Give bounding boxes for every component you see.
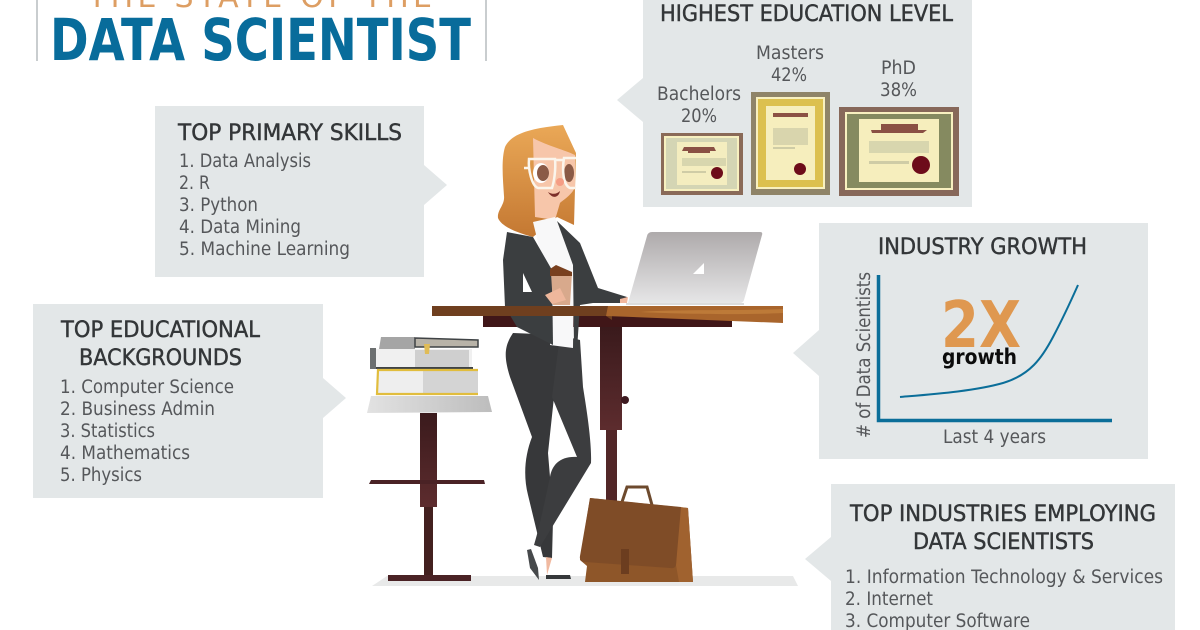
label: masters: 42% bbox=[771, 65, 807, 86]
label: phd: PhD bbox=[881, 58, 916, 79]
skills list: 4. Data Mining bbox=[179, 217, 301, 238]
educational backgrounds list: 1. Computer Science bbox=[60, 377, 234, 398]
heading: top industries: TOP INDUSTRIES EMPLOYING bbox=[849, 502, 1156, 527]
heading: top educational backgrounds: TOP EDUCATIONAL bbox=[60, 318, 261, 343]
heading: highest education level: HIGHEST EDUCATION LEVEL bbox=[660, 2, 954, 27]
icon: masters certificate bbox=[751, 92, 830, 195]
callout: 2x growth: 2X bbox=[941, 289, 1021, 363]
icon: bachelors certificate bbox=[661, 133, 743, 195]
heading: industry growth: INDUSTRY GROWTH bbox=[878, 235, 1087, 260]
educational backgrounds list bbox=[60, 377, 234, 486]
mouth bbox=[548, 191, 560, 197]
table top bbox=[432, 306, 783, 323]
title main: DATA SCIENTIST bbox=[50, 6, 471, 74]
axis label: y: # of Data Scientists bbox=[854, 272, 875, 438]
label: bachelors bbox=[657, 84, 741, 127]
eyes bbox=[533, 163, 574, 183]
coffee cup bbox=[545, 265, 572, 305]
legs bbox=[506, 333, 591, 558]
heading: top industries: DATA SCIENTISTS bbox=[913, 530, 1094, 555]
label: bachelors: 20% bbox=[681, 106, 717, 127]
table bbox=[483, 316, 732, 502]
callout: 2x growth: growth bbox=[942, 345, 1017, 369]
hair bbox=[498, 125, 576, 237]
skills list bbox=[179, 151, 350, 260]
heading: top educational backgrounds: BACKGROUNDS bbox=[79, 346, 242, 371]
educational backgrounds list: 4. Mathematics bbox=[60, 443, 190, 464]
industries list: 2. Internet bbox=[845, 589, 933, 610]
panel: highest education level bbox=[617, 0, 972, 207]
shoes bbox=[527, 549, 571, 580]
jacket bbox=[503, 232, 553, 345]
line chart: growth curve bbox=[878, 275, 1112, 420]
icon: phd certificate bbox=[839, 107, 959, 196]
educational backgrounds list: 5. Physics bbox=[60, 465, 142, 486]
industries list: 1. Information Technology & Services bbox=[845, 567, 1163, 588]
panel: top primary skills bbox=[155, 106, 447, 277]
laptop bbox=[626, 232, 762, 305]
skills list: 5. Machine Learning bbox=[179, 239, 350, 260]
label: bachelors: Bachelors bbox=[657, 84, 741, 105]
label: phd bbox=[880, 58, 917, 101]
label: masters bbox=[756, 43, 824, 86]
panel: industry growth bbox=[793, 223, 1148, 459]
title block bbox=[36, 0, 487, 74]
heading: top educational backgrounds bbox=[60, 318, 261, 371]
label: masters: Masters bbox=[756, 43, 824, 64]
stool bbox=[367, 396, 492, 581]
panel: top educational backgrounds bbox=[33, 304, 346, 498]
skills list: 1. Data Analysis bbox=[179, 151, 311, 172]
character: woman at laptop bbox=[498, 125, 628, 580]
books bbox=[370, 337, 478, 394]
heading: top industries bbox=[849, 502, 1156, 555]
stool with books bbox=[367, 337, 492, 581]
face bbox=[533, 138, 575, 220]
floor shadow bbox=[372, 576, 798, 586]
panel: top industries bbox=[805, 484, 1175, 630]
briefcase bbox=[580, 487, 693, 582]
label: phd: 38% bbox=[880, 80, 917, 101]
axis label: x: Last 4 years bbox=[943, 427, 1046, 448]
industries list bbox=[845, 567, 1163, 630]
hand on laptop bbox=[620, 297, 628, 303]
nose bbox=[556, 178, 564, 186]
glasses bbox=[524, 158, 576, 188]
skills list: 3. Python bbox=[179, 195, 258, 216]
shirt bbox=[533, 217, 574, 348]
heading: top primary skills: TOP PRIMARY SKILLS bbox=[177, 121, 402, 146]
skills list: 2. R bbox=[179, 173, 210, 194]
educational backgrounds list: 3. Statistics bbox=[60, 421, 155, 442]
educational backgrounds list: 2. Business Admin bbox=[60, 399, 215, 420]
